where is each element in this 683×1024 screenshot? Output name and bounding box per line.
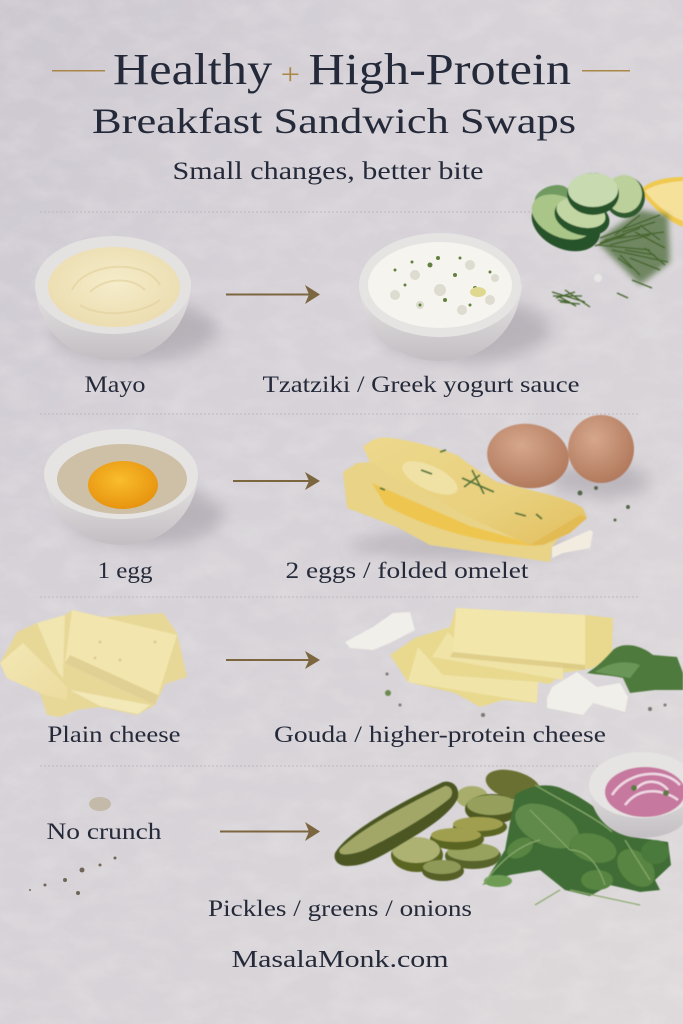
arrow bbox=[226, 285, 320, 304]
label: Plain cheese: Plain cheese bbox=[48, 722, 180, 747]
panel: crunch swap bbox=[29, 752, 683, 921]
label: No crunch: No crunch bbox=[46, 819, 162, 844]
icon: greens bbox=[483, 785, 671, 905]
icon: raw egg bowl bbox=[44, 429, 223, 545]
website: MasalaMonk.com bbox=[232, 947, 449, 973]
subtitle: Small changes, better bite bbox=[172, 158, 484, 185]
garnish: cucumber, dill and lemon bbox=[523, 173, 683, 307]
panel: egg swap bbox=[44, 415, 650, 583]
icon: plain cheese slices bbox=[0, 610, 187, 717]
label: Mayo: Mayo bbox=[84, 372, 146, 397]
icon: onion bowl bbox=[589, 752, 683, 838]
arrow bbox=[220, 822, 320, 841]
icon: mayo bowl bbox=[35, 236, 217, 362]
crumbs bbox=[29, 797, 116, 895]
icon: tzatziki bowl bbox=[359, 233, 550, 362]
icon: folded omelet and eggs bbox=[343, 415, 650, 562]
label: Gouda: Gouda / higher-protein cheese bbox=[274, 722, 606, 747]
arrow bbox=[226, 651, 320, 669]
arrow bbox=[233, 472, 320, 490]
label: Tzatziki: Tzatziki / Greek yogurt sauce bbox=[262, 372, 580, 397]
panel: cheese swap bbox=[0, 608, 683, 747]
label: 1 egg: 1 egg bbox=[98, 558, 153, 583]
icon: pickles bbox=[335, 764, 544, 881]
title block bbox=[52, 45, 630, 185]
title line 1: Healthy + High-Protein bbox=[113, 45, 571, 94]
icon: gouda slices with feta and basil bbox=[345, 608, 683, 717]
label: 2 eggs: 2 eggs / folded omelet bbox=[286, 558, 529, 583]
title line 2: Breakfast Sandwich Swaps bbox=[92, 101, 576, 141]
panel: mayo to tzatziki bbox=[35, 233, 580, 397]
label: Pickles: Pickles / greens / onions bbox=[208, 896, 472, 921]
